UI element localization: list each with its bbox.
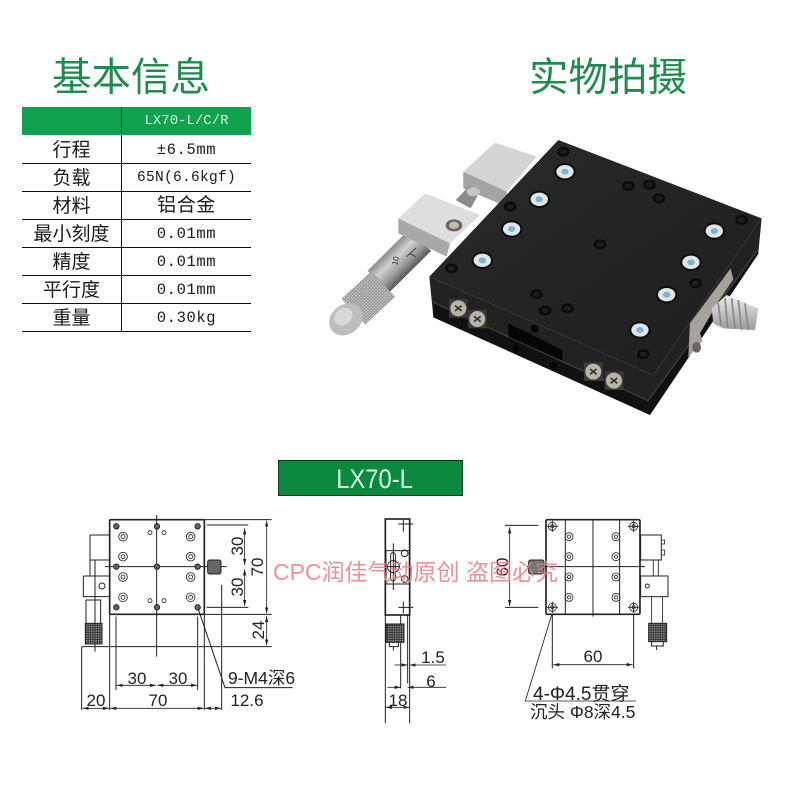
- top view dimensions: 70: [248, 558, 267, 576]
- table header: LX70-L/C/R: [144, 113, 228, 129]
- micrometer knurled thimble: [323, 284, 383, 342]
- model banner: LX70-L: [336, 464, 413, 494]
- top view dimensions: 24: [249, 621, 268, 639]
- row: min scale: [22, 219, 251, 248]
- row: parallelism: 平行度: [43, 280, 100, 301]
- top view dimensions: 20: [87, 691, 105, 710]
- side and bottom view dimensions: 4-Φ4.5贯穿: [533, 683, 629, 705]
- row: weight: 重量: [52, 308, 90, 329]
- side and bottom view dimensions: 60: [584, 647, 602, 666]
- title: product photo: 实物拍摄: [529, 56, 687, 100]
- technical drawing: bottom view: [505, 520, 668, 701]
- row: travel: 行程: [52, 140, 90, 161]
- row: weight: [22, 303, 251, 332]
- side and bottom view dimensions: 6: [426, 672, 436, 691]
- row: travel: ±6.5mm: [157, 141, 216, 159]
- stage body side: [429, 218, 762, 415]
- top view dimensions: 30: [169, 669, 187, 688]
- coupling pin: [456, 186, 480, 208]
- side and bottom view dimensions: 1.5: [421, 648, 445, 667]
- row: load: 负载: [52, 168, 90, 189]
- row: material: 材料: [52, 196, 90, 217]
- micrometer barrel: 10: [390, 255, 401, 266]
- top view dimensions: 30: [228, 578, 247, 596]
- top view dimensions: 30: [228, 537, 247, 555]
- top view dimensions: 30: [128, 669, 146, 688]
- watermark: CPC润佳气动原创 盗图必究: [273, 559, 558, 585]
- stage top plate: [429, 140, 762, 375]
- side adjustment screws and window: [449, 299, 623, 390]
- row: min scale: 最小刻度: [33, 224, 110, 245]
- row: parallelism: 0.01mm: [157, 281, 216, 299]
- row: precision: 精度: [52, 252, 90, 273]
- row: weight: 0.30kg: [157, 309, 216, 327]
- silver back block: [463, 143, 537, 207]
- model banner: [278, 460, 463, 496]
- top view dimensions: [87, 537, 295, 710]
- side and bottom view dimensions: 沉头 Φ8深4.5: [530, 702, 635, 722]
- silver front block: [398, 193, 480, 257]
- row: min scale: 0.01mm: [157, 225, 216, 243]
- top view dimensions: 12.6: [230, 691, 264, 710]
- row: load: [22, 163, 251, 192]
- spec table: [22, 107, 251, 332]
- row: material: 铝合金: [157, 195, 216, 217]
- top view dimensions: 70: [149, 691, 167, 710]
- row: precision: [22, 247, 251, 276]
- table header: [22, 107, 251, 135]
- row: material: [22, 191, 251, 220]
- stage right thumb screw: [688, 268, 758, 357]
- side and bottom view dimensions: 60: [493, 558, 512, 576]
- row: load: 65N(6.6kgf): [137, 170, 236, 186]
- row: precision: 0.01mm: [157, 253, 216, 271]
- row: travel: [22, 135, 251, 164]
- title: basic information: 基本信息: [52, 56, 210, 100]
- micrometer barrel: [378, 240, 420, 282]
- top view dimensions: 9-M4深6: [228, 668, 295, 688]
- column divider: [121, 107, 122, 331]
- side and bottom view dimensions: 18: [389, 691, 407, 710]
- row: parallelism: [22, 275, 251, 304]
- side and bottom view dimensions: [389, 558, 635, 722]
- technical drawing: side view: [385, 519, 446, 723]
